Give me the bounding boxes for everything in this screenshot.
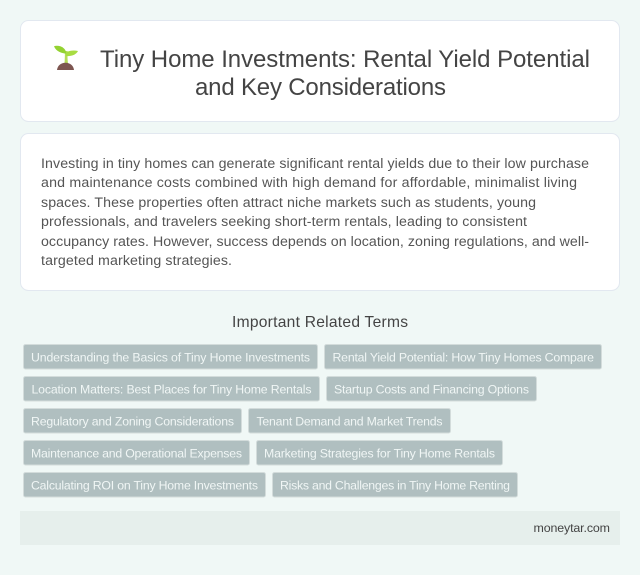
panel: related terms tags <box>24 344 602 497</box>
tag <box>248 408 450 433</box>
tag <box>24 472 266 497</box>
tag <box>24 408 242 433</box>
tag: Tenant Demand and Market Trends <box>256 414 442 428</box>
tag: Risks and Challenges in Tiny Home Renting <box>280 478 510 492</box>
tag: Location Matters: Best Places for Tiny Home Rentals <box>32 382 312 396</box>
panel: title card <box>20 20 620 122</box>
tag <box>24 440 250 465</box>
icon: seedling <box>54 46 78 70</box>
tag: Regulatory and Zoning Considerations <box>31 414 234 428</box>
tag: Maintenance and Operational Expenses <box>31 446 242 460</box>
panel: intro paragraph: Investing in tiny homes can generate significant rental yields due to their low purchase <box>41 156 589 172</box>
footer <box>20 511 620 545</box>
title <box>100 46 590 101</box>
tag: Marketing Strategies for Tiny Home Rentals <box>264 446 495 460</box>
panel: intro paragraph: targeted marketing strategies. <box>41 253 232 269</box>
tag <box>24 344 318 369</box>
tag <box>324 344 602 369</box>
panel: intro paragraph: professionals, and travelers seeking short-term rentals, leading to consistent <box>41 214 527 230</box>
tag: Calculating ROI on Tiny Home Investments <box>31 478 258 492</box>
panel: intro paragraph: occupancy rates. However, success depends on location, zoning regulations, and well- <box>41 234 589 250</box>
heading: important related terms: Important Related Terms <box>232 314 408 331</box>
tag: Understanding the Basics of Tiny Home Investments <box>31 350 310 364</box>
tag <box>24 376 320 401</box>
title: Tiny Home Investments: Rental Yield Potential <box>100 46 590 73</box>
panel: intro paragraph: spaces. These properties often attract niche markets such as students, young <box>41 195 536 211</box>
tag: Rental Yield Potential: How Tiny Homes Compare <box>332 350 594 364</box>
panel: intro paragraph: and maintenance costs combined with high demand for affordable, minimalist living <box>41 175 577 191</box>
tag: Startup Costs and Financing Options <box>334 382 529 396</box>
tag <box>326 376 536 401</box>
tag <box>256 440 502 465</box>
footer: moneytar.com <box>534 521 610 535</box>
panel: intro paragraph <box>20 134 620 290</box>
title: and Key Considerations <box>195 74 446 101</box>
tag <box>272 472 518 497</box>
